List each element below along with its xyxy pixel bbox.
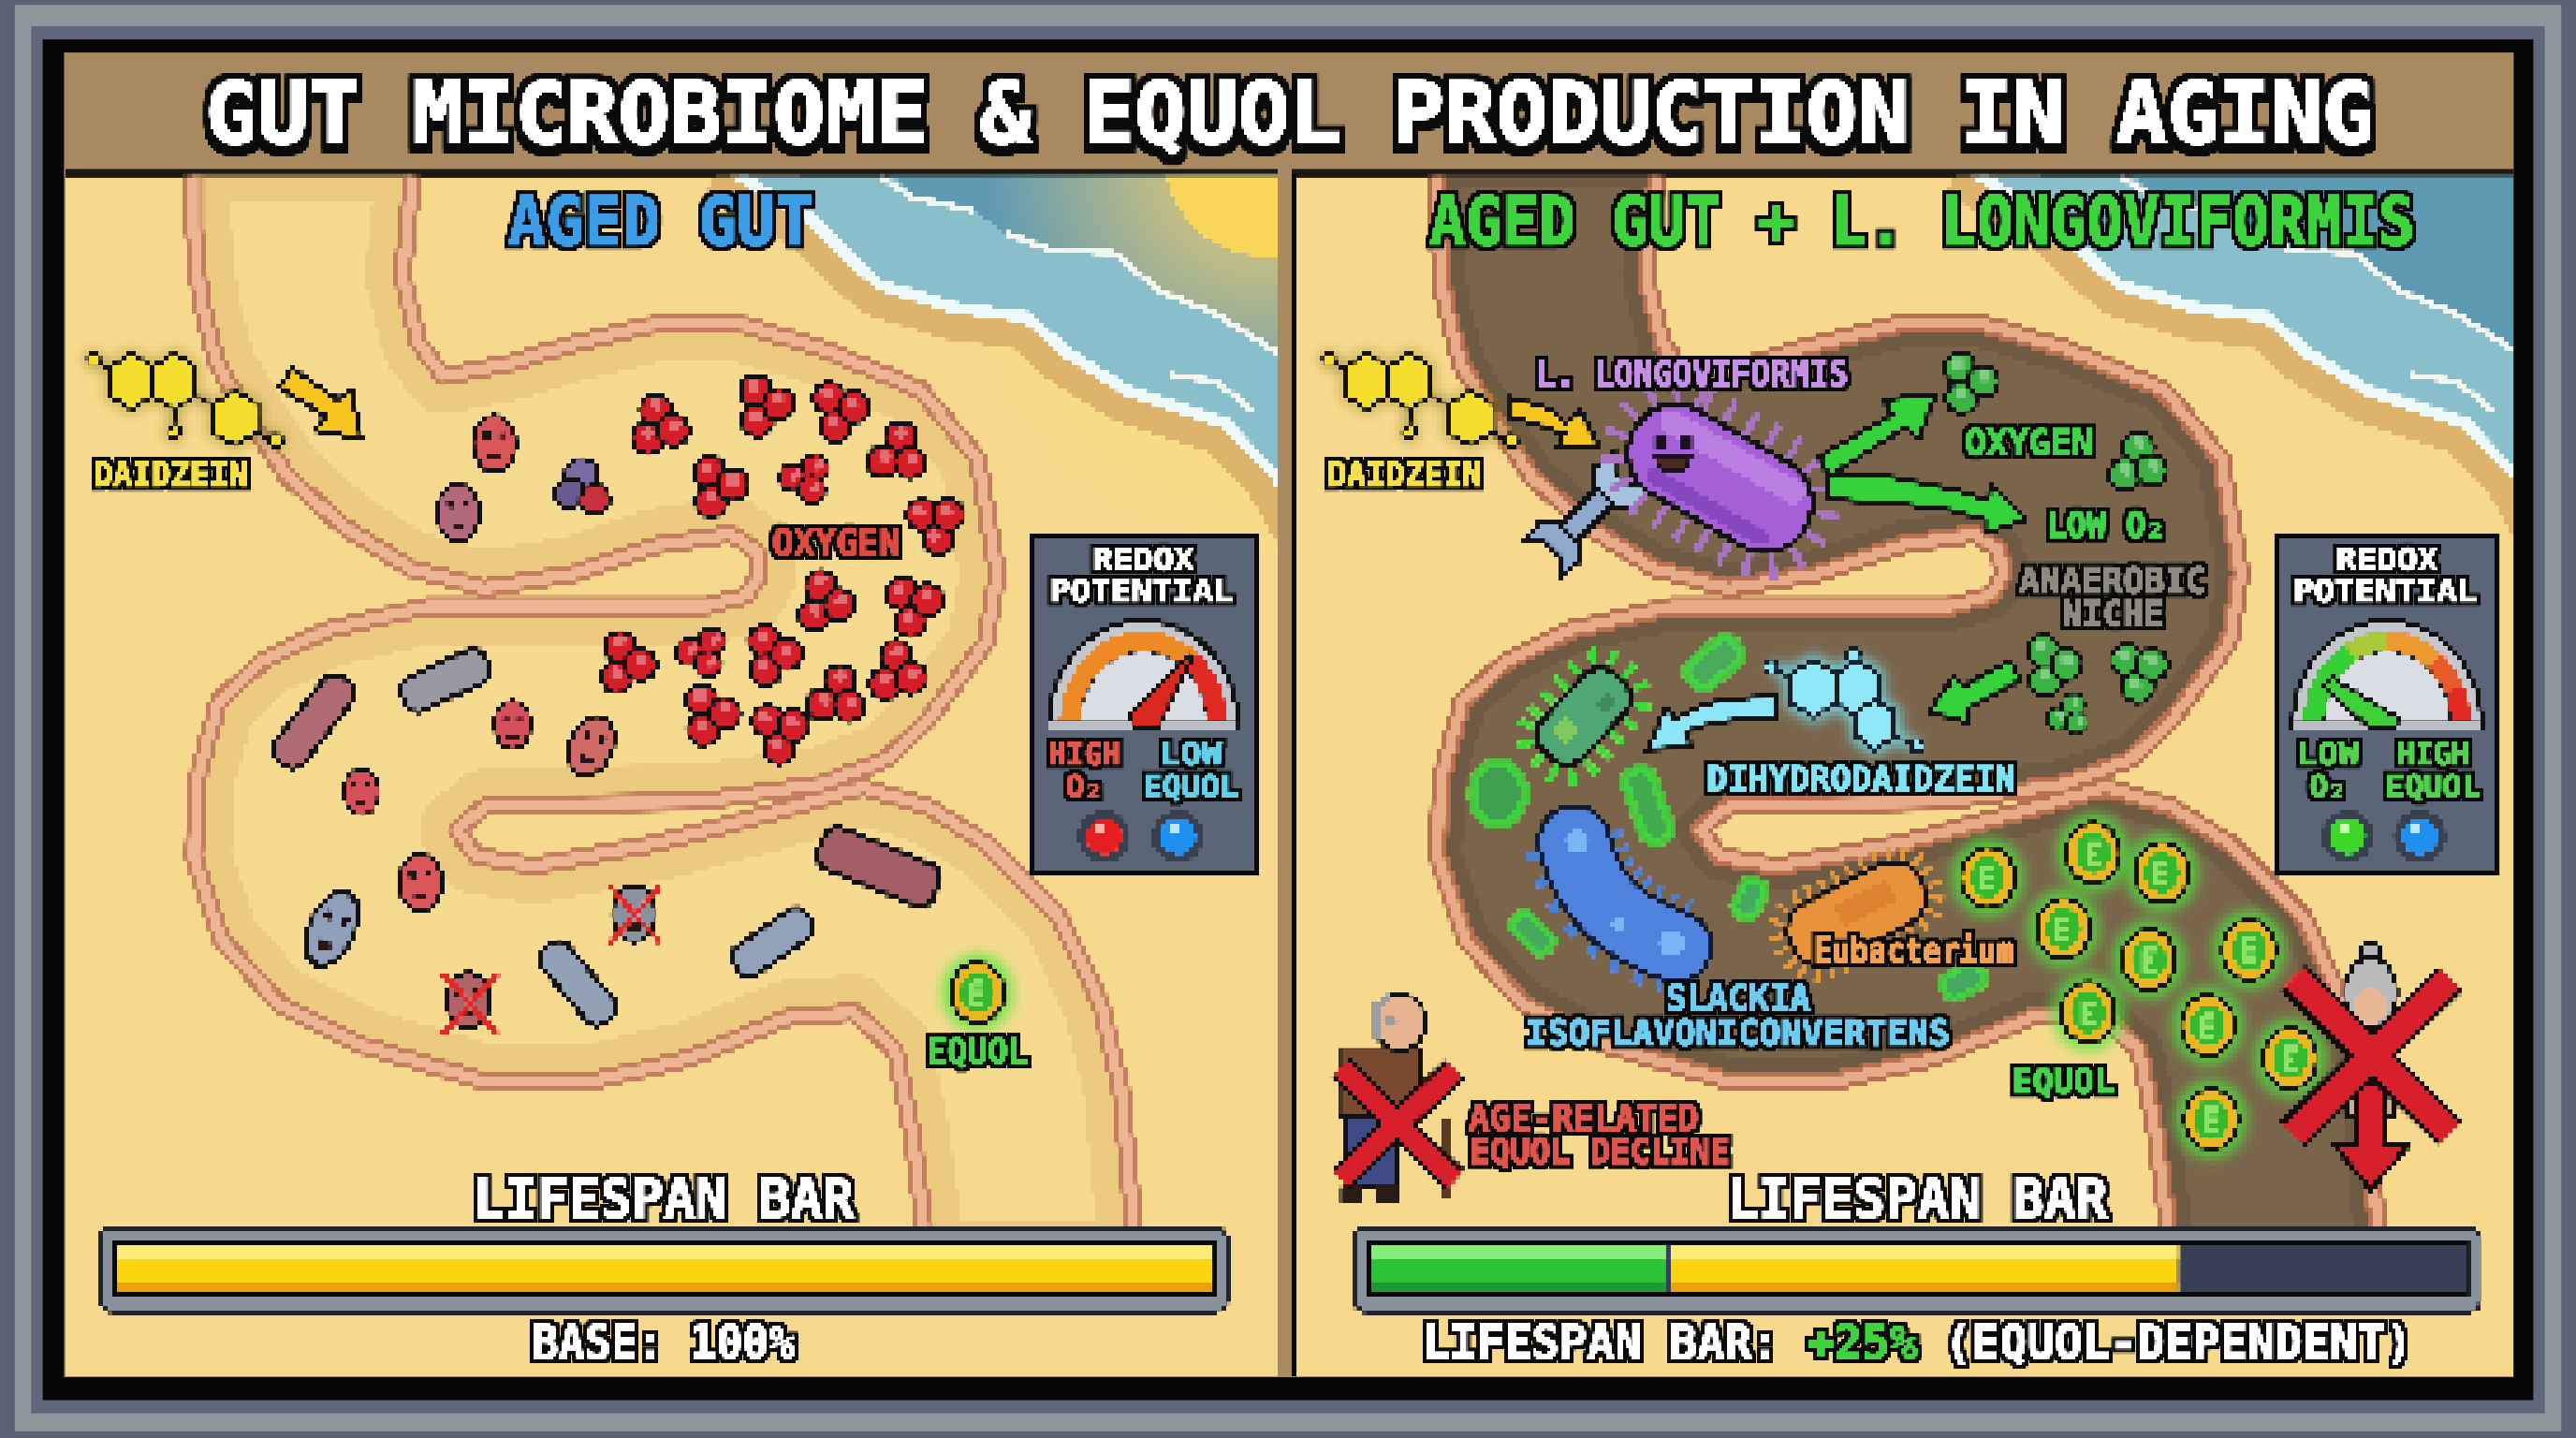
label: slackia isoflavoniconvertens: [1526, 978, 1950, 1054]
bacterium face: [1654, 435, 1692, 472]
label: anaerobic niche: ANAEROBIC: [2019, 561, 2206, 603]
label: low o2: LOW O₂: [2047, 505, 2165, 547]
gauge title: [1050, 541, 1234, 609]
gauge labels: LOW: [1160, 735, 1223, 771]
panel: aged gut: [66, 169, 1278, 1376]
gut tube: [194, 165, 1137, 1257]
arrow: oxygen consumed: [1819, 394, 1936, 477]
label: daidzein: DAIDZEIN: [94, 455, 248, 495]
arrow: daidzein to bacterium: [1512, 398, 1599, 447]
gauge labels: O₂: [1065, 768, 1103, 804]
dying microbes: [267, 416, 944, 1035]
green microbes: [1472, 632, 1988, 1004]
redox gauge panel: [1032, 536, 1255, 874]
panel: aged gut plus l. longoviformis: [1293, 165, 2554, 1377]
title: GUT MICROBIOME & EQUOL PRODUCTION IN AGING: [205, 64, 2374, 164]
icon: wrench: [1522, 449, 1652, 580]
gauge title: POTENTIAL: [1050, 572, 1234, 609]
label: slackia isoflavoniconvertens: ISOFLAVONICONVERTENS: [1526, 1012, 1950, 1054]
label: oxygen: OXYGEN: [1965, 422, 2093, 464]
label: dihydrodaidzein: DIHYDRODAIDZEIN: [1707, 758, 2016, 799]
gauge title: [2293, 541, 2478, 609]
icon: daidzein molecule: [88, 353, 283, 447]
gauge labels: [2297, 735, 2481, 804]
arrow: green to molecule: [1928, 661, 2021, 723]
icon: old man crossed out: [1339, 994, 1456, 1201]
gauge labels: HIGH: [1048, 735, 1120, 771]
lifespan bar: segmented: [1354, 1227, 2481, 1312]
panel artwork: [66, 169, 1278, 1376]
gauge labels: O₂: [2309, 768, 2347, 804]
heading: aged gut + l. longoviformis: AGED GUT + L. LONGOVIFORMIS: [1429, 183, 2415, 261]
indicator lights: [1077, 810, 1204, 863]
label: l. longoviformis: L. LONGOVIFORMIS: [1536, 354, 1848, 396]
green oxygen clusters: [1944, 353, 2179, 745]
lifespan heading: LIFESPAN BAR: [473, 1167, 855, 1231]
panel labels: [1327, 183, 2481, 1372]
label: anaerobic niche: [2019, 561, 2206, 636]
heading: aged gut: AGED GUT: [507, 183, 813, 261]
oxygen clusters: [597, 375, 978, 769]
label: equol: EQUOL: [927, 1032, 1029, 1072]
gauge title: POTENTIAL: [2293, 572, 2478, 609]
equol coins: [1952, 814, 2326, 1159]
gauge labels: HIGH: [2397, 735, 2469, 771]
base label: BASE: 100%: [533, 1316, 796, 1372]
icon: single equol coin: [942, 953, 1014, 1032]
gauge labels: EQUOL: [2385, 768, 2481, 804]
panel background: beach: [1298, 165, 2554, 1377]
label: daidzein: DAIDZEIN: [1327, 455, 1482, 495]
panel background: beach: [66, 174, 1278, 1376]
gauge labels: [1048, 735, 1238, 804]
label: equol: EQUOL: [2012, 1061, 2115, 1101]
green segment: [1370, 1246, 1664, 1293]
icon: dihydrodaidzein molecule: [1764, 648, 1924, 753]
arrow: low oxygen: [1827, 474, 2027, 535]
icon: purple oxygen cluster: [555, 459, 609, 514]
lifespan bar: full: [100, 1227, 1227, 1312]
gauge labels: LOW: [2297, 735, 2360, 771]
label: oxygen: OXYGEN: [772, 521, 900, 565]
icon: daidzein molecule: [1324, 353, 1517, 447]
arrow: daidzein enters gut: [279, 368, 361, 439]
label: slackia isoflavoniconvertens: SLACKIA: [1666, 978, 1810, 1020]
label: eubacterium: Eubacterium: [1814, 931, 2014, 973]
lifespan heading: LIFESPAN BAR: [1727, 1167, 2108, 1231]
indicator lights: [2321, 810, 2446, 863]
gauge dial: [1046, 618, 1240, 731]
panel labels: [94, 183, 1238, 1372]
icon: blue bacterium: [1566, 829, 1686, 957]
gut tube: dark: [1438, 165, 2380, 1257]
label: anaerobic niche: NICHE: [2062, 594, 2163, 636]
label: age-related equol decline: AGE-RELATED: [1469, 1098, 1699, 1140]
redox gauge panel: [2276, 536, 2499, 874]
arrow: cyan conversion: [1647, 697, 1778, 749]
title band: [64, 52, 2513, 171]
lifespan result label: LIFESPAN BAR: +25% (EQUOL-DEPENDENT): [1422, 1316, 2412, 1372]
icon: orange bacterium: [1765, 842, 1948, 986]
gauge dial: [2291, 618, 2484, 731]
label: age-related equol decline: [1469, 1098, 1730, 1173]
gauge title: REDOX: [1092, 541, 1194, 578]
panel artwork: [1293, 165, 2554, 1377]
gauge title: REDOX: [2336, 541, 2438, 578]
gauge labels: EQUOL: [1144, 768, 1238, 804]
icon: old woman crossed out with down arrow: [2293, 942, 2452, 1190]
icon: purple bacterium: [1597, 373, 1843, 583]
label: age-related equol decline: EQUOL DECLINE: [1471, 1131, 1730, 1173]
yellow segment: [1669, 1246, 2178, 1293]
